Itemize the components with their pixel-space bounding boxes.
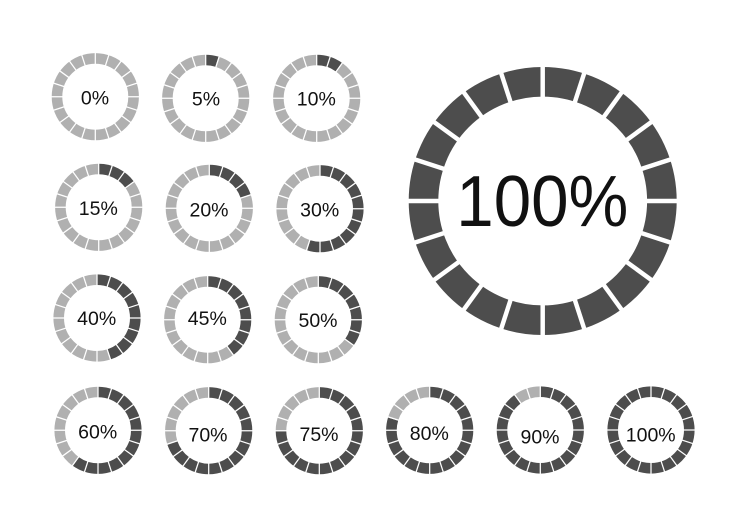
progress ring: 70% [159,381,259,481]
progress ring: 45% [158,270,258,370]
progress ring: 75% [269,381,369,481]
progress ring: 50%: 50% [298,310,338,332]
progress ring: 50% [268,270,368,370]
progress ring: 70%: 70% [188,425,228,447]
progress ring: 0%: 0% [81,87,109,109]
progress ring: 10% [267,48,367,148]
progress ring: 60%: 60% [78,421,117,443]
progress ring: 100%: 100% [626,425,676,447]
progress ring: 15% [49,157,149,257]
progress ring: 15%: 15% [79,198,118,220]
progress ring: 45%: 45% [188,308,227,330]
progress ring: 60% [48,380,148,480]
large progress ring: 100% [389,47,697,355]
progress ring: 90%: 90% [520,426,560,448]
progress ring: 30% [270,159,370,259]
progress ring: 80%: 80% [410,423,449,445]
progress ring: 30%: 30% [300,200,339,222]
progress ring: 0% [45,47,145,147]
progress ring: 40%: 40% [77,308,116,330]
progress ring: 5% [156,48,256,148]
progress ring: 80% [380,380,480,480]
progress ring: 75%: 75% [299,424,339,446]
large progress ring: 100%: 100% [456,162,628,242]
progress ring: 40% [47,268,147,368]
progress ring: 20%: 20% [189,200,229,222]
progress ring: 100% [601,380,701,480]
progress ring: 10%: 10% [297,89,336,111]
progress ring: 90% [490,380,590,480]
progress ring: 20% [159,158,259,258]
progress ring: 5%: 5% [192,89,220,111]
